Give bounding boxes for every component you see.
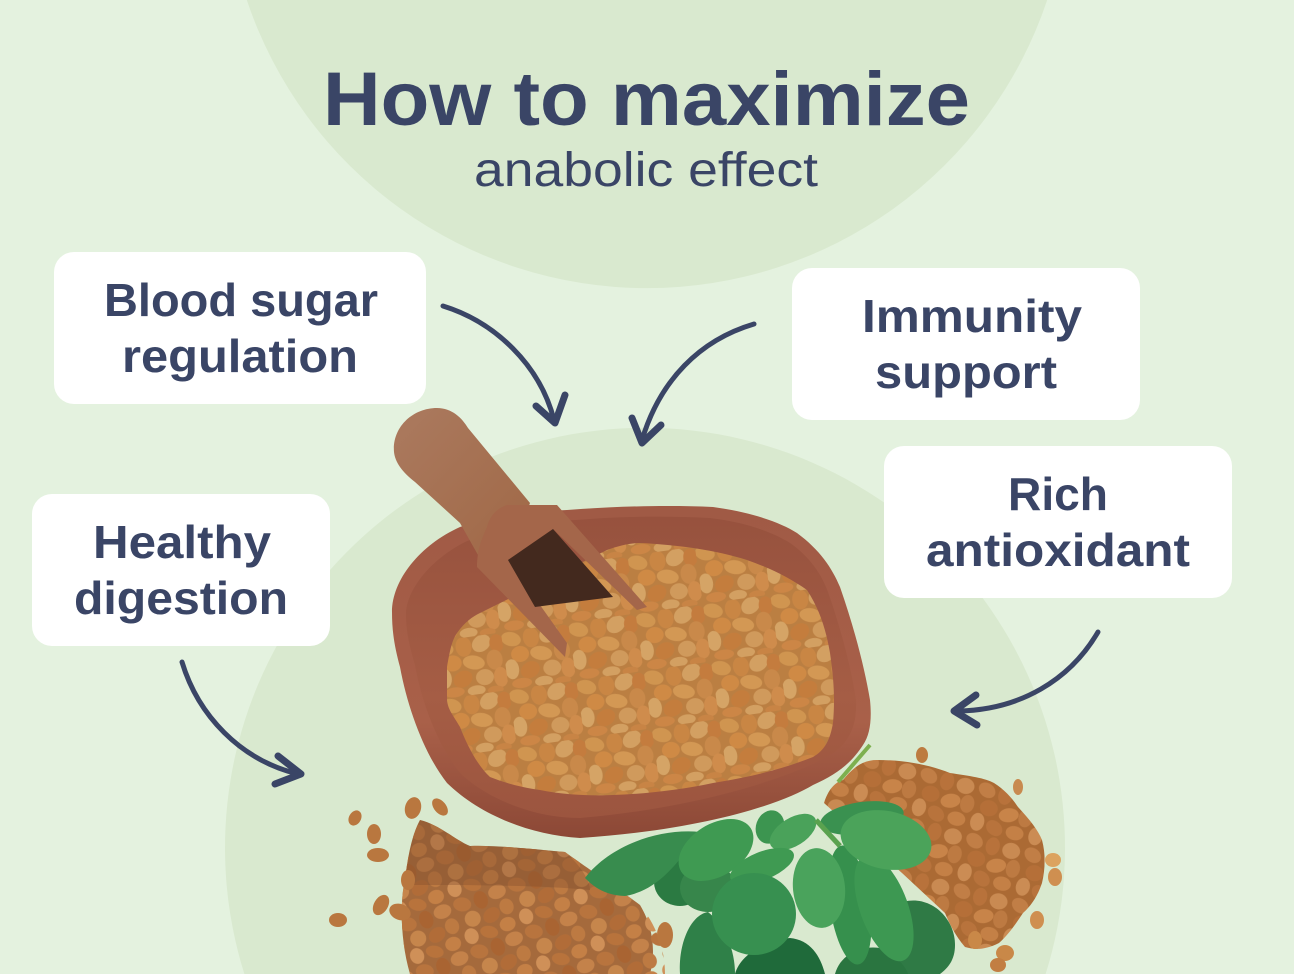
card: healthy digestion: Healthy <box>93 516 271 568</box>
left seed pile <box>329 795 673 974</box>
right seed pile <box>824 747 1062 972</box>
card: immunity support: support <box>875 346 1057 398</box>
top circle <box>247 0 1047 288</box>
arrow: blood sugar to bowl <box>443 306 565 423</box>
bowl inner wall <box>406 517 856 818</box>
arrow: digestion to bowl <box>182 662 301 784</box>
subtitle: anabolic effect <box>474 144 818 197</box>
arrow: immunity to bowl <box>632 324 754 443</box>
bowl seeds <box>447 543 834 795</box>
card: healthy digestion <box>32 494 330 646</box>
card: rich antioxidant: antioxidant <box>926 524 1190 576</box>
card: blood sugar regulation <box>54 252 426 404</box>
card: healthy digestion: digestion <box>74 572 288 624</box>
fenugreek leaves <box>585 745 955 974</box>
title: How to maximize <box>323 57 970 142</box>
arrow: antioxidant to bowl <box>954 632 1098 725</box>
upper left leaf <box>667 806 765 894</box>
card: blood sugar regulation: regulation <box>122 330 358 382</box>
bottom circle <box>225 428 1065 974</box>
bowl <box>392 506 871 838</box>
cropped lower leaves <box>895 901 955 974</box>
large top right leaf <box>835 802 937 878</box>
bowl shell <box>392 506 871 838</box>
scoop opening <box>508 529 613 607</box>
stem <box>838 745 870 782</box>
card: rich antioxidant: Rich <box>1008 468 1108 520</box>
card: rich antioxidant <box>884 446 1232 598</box>
card: blood sugar regulation: Blood sugar <box>104 274 378 326</box>
card: immunity support: Immunity <box>862 290 1082 342</box>
scoop <box>394 408 647 657</box>
card: immunity support <box>792 268 1140 420</box>
large left leaf <box>585 831 700 896</box>
scoop head collar and walls <box>477 505 647 657</box>
scoop handle <box>394 408 530 555</box>
